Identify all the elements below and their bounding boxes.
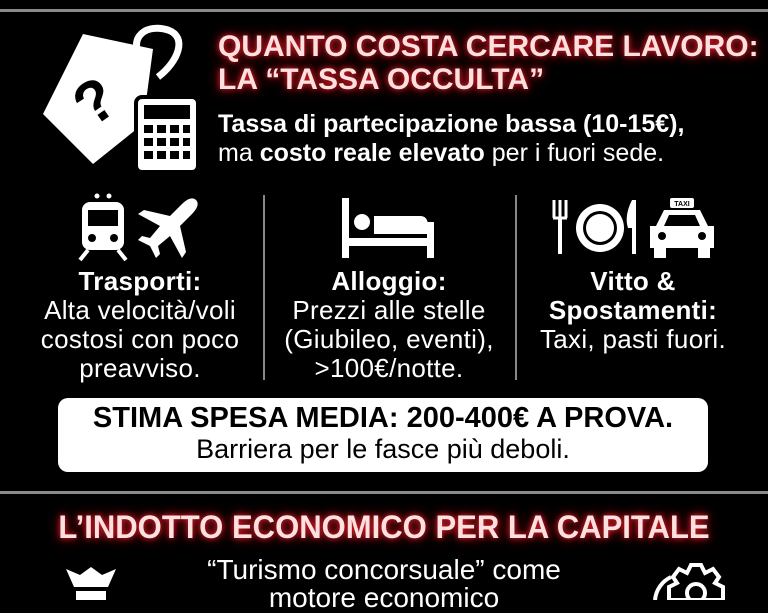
- divider 2: [515, 195, 517, 380]
- divider 1: [263, 195, 265, 380]
- column: vitto: Taxi, pasti fuori.: [540, 324, 726, 354]
- column: trasporti: Trasporti:: [79, 266, 201, 296]
- intro text: Tassa di partecipazione bassa (10-15€),: [218, 110, 684, 138]
- column: trasporti: Alta velocità/voli: [44, 295, 236, 325]
- icon: price tag with calculator: ?: [60, 64, 129, 139]
- callout: stima spesa: STIMA SPESA MEDIA: 200-400€ A PROVA.: [93, 402, 673, 434]
- column: alloggio: Prezzi alle stelle: [292, 295, 486, 325]
- column: trasporti: preavviso.: [79, 353, 201, 383]
- intro text: [218, 110, 684, 167]
- heading: indotto economico: L’INDOTTO ECONOMICO PER LA CAPITALE: [58, 509, 710, 545]
- icon: gear cycle: [653, 563, 725, 600]
- column: vitto: Spostamenti:: [549, 295, 717, 325]
- icon: bed: [342, 198, 434, 258]
- text: turismo concorsuale: “Turismo concorsuale” come: [207, 554, 561, 585]
- callout: stima spesa: [58, 398, 708, 472]
- column: trasporti: [41, 266, 239, 383]
- icon: money bag: [66, 567, 116, 600]
- text: turismo concorsuale: motore economico: [269, 582, 499, 613]
- title: [210, 26, 762, 98]
- column: alloggio: [284, 266, 494, 383]
- title: LA “TASSA OCCULTA”: [218, 63, 544, 96]
- column: vitto: Vitto &: [590, 266, 676, 296]
- icon: plate and taxi: [552, 198, 714, 258]
- icon: plate and taxi: TAXI: [674, 201, 690, 208]
- column: alloggio: Alloggio:: [331, 266, 447, 296]
- icon: price tag with calculator: [43, 24, 196, 170]
- column: alloggio: >100€/notte.: [315, 353, 463, 383]
- icon: train and plane: [78, 194, 198, 262]
- text: turismo concorsuale: [207, 554, 561, 613]
- column: alloggio: (Giubileo, eventi),: [284, 324, 494, 354]
- intro text: ma costo reale elevato per i fuori sede.: [218, 139, 664, 167]
- column: vitto: [540, 266, 726, 354]
- callout: stima spesa: Barriera per le fasce più deboli.: [196, 434, 570, 464]
- title: QUANTO COSTA CERCARE LAVORO:: [218, 30, 759, 63]
- column: trasporti: costosi con poco: [41, 324, 239, 354]
